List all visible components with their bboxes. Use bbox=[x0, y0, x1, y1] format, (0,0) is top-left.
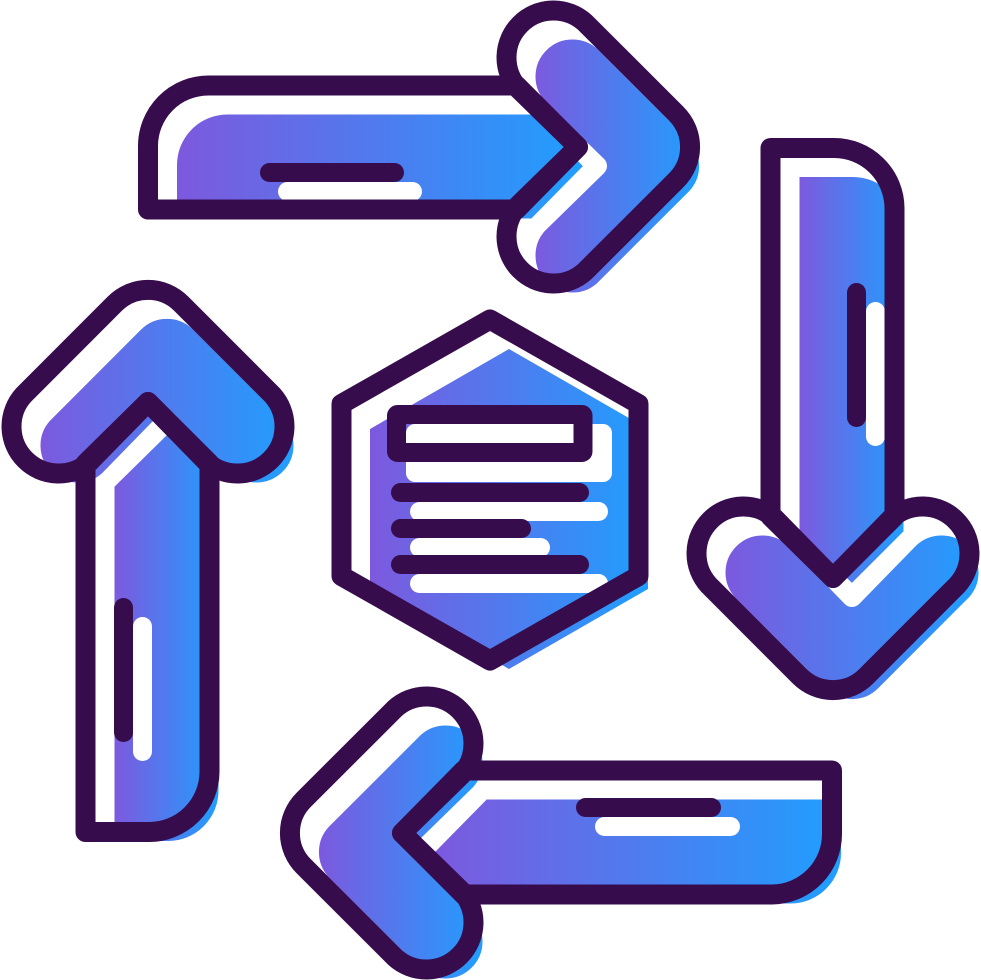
document text lines bbox=[391, 483, 589, 574]
arrow: top pointing right bbox=[138, 0, 700, 294]
arrow: left pointing up bbox=[2, 280, 294, 842]
white highlight lines bbox=[406, 424, 612, 593]
icon: central hexagon with document lines bbox=[342, 320, 648, 669]
document header box bbox=[396, 414, 583, 452]
hexagon gradient fill bbox=[370, 349, 648, 669]
arrow: bottom pointing left bbox=[280, 686, 842, 980]
hexagon outline bbox=[342, 320, 638, 660]
arrow: right pointing down bbox=[686, 138, 980, 700]
